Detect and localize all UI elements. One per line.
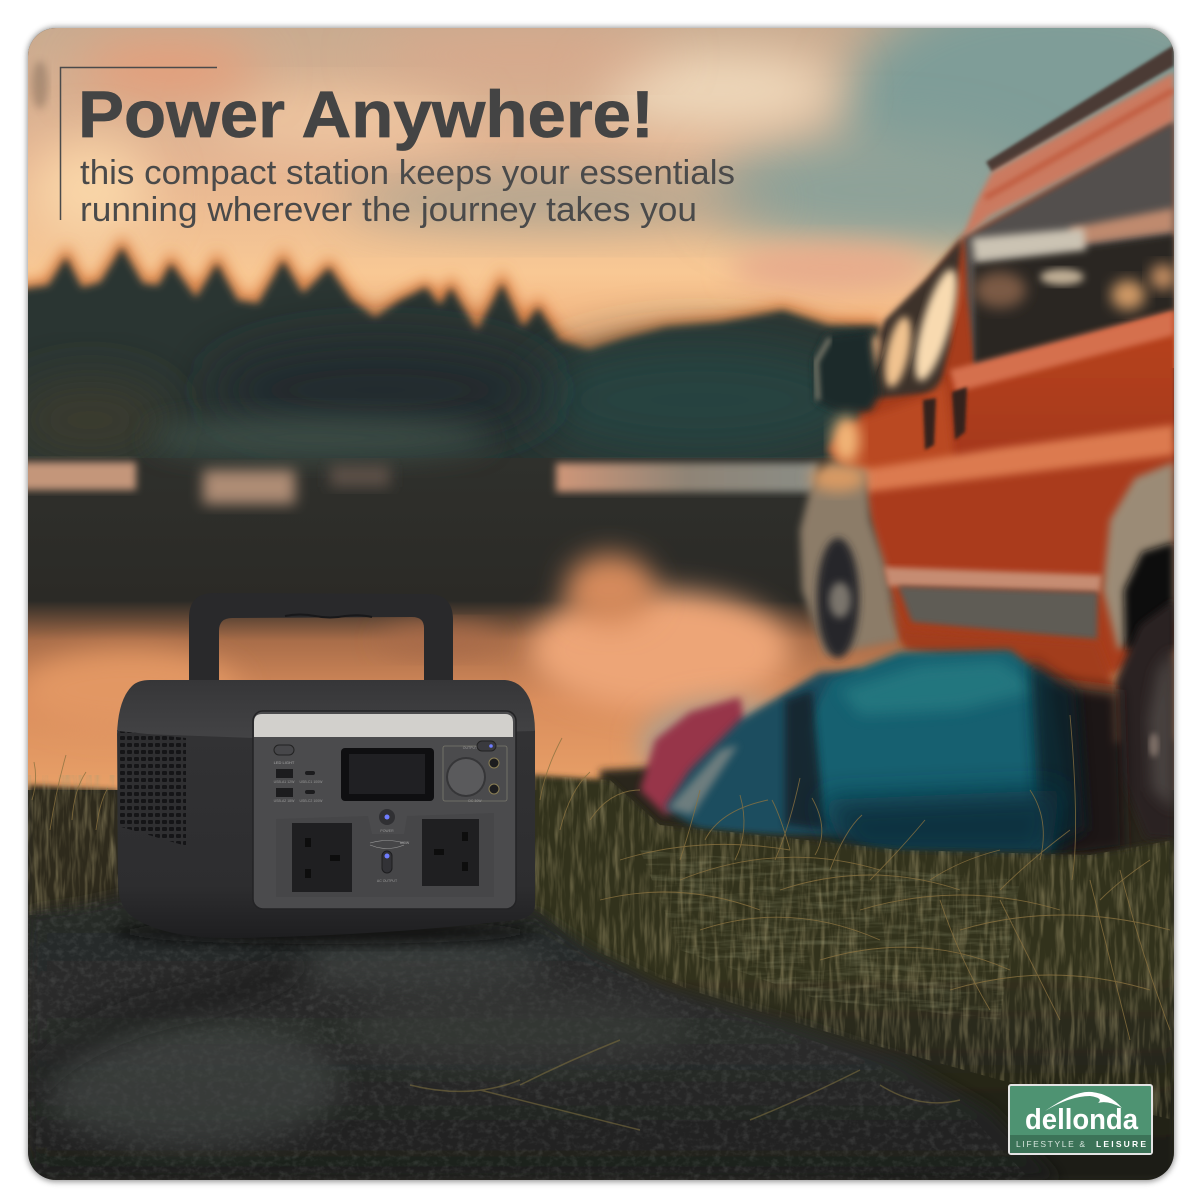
- front bumper and wheel arch: [800, 465, 900, 655]
- dellonda logo: LIFESTYLE &: [1016, 1139, 1085, 1149]
- dellonda logo: dellonda: [1025, 1104, 1139, 1136]
- USB ports: USB-A2 18W: [274, 799, 295, 803]
- car front windows: [866, 237, 964, 402]
- power button: [379, 809, 395, 833]
- fender: [828, 380, 955, 478]
- forest shading: [10, 340, 870, 460]
- station lid: [117, 680, 535, 738]
- side sill: [884, 567, 1102, 592]
- dellonda logo: [1009, 1085, 1152, 1154]
- lake highlights: [20, 462, 820, 790]
- subheading: [80, 154, 735, 229]
- rear wheel arch: [1103, 462, 1174, 650]
- rear wheel: [1110, 602, 1174, 790]
- USB ports: USB-C1 100W: [300, 780, 323, 784]
- ground behind bags: [594, 739, 1174, 794]
- DC output group: OUTPUT: [463, 746, 478, 750]
- AC output switch: 600W: [400, 841, 410, 845]
- USB ports: [274, 769, 323, 803]
- grass on shore: [28, 775, 1174, 1180]
- heading: Power Anywhere!: [78, 77, 654, 151]
- DC output group: [443, 741, 507, 803]
- dark under car: [1040, 680, 1125, 860]
- USB ports: USB-C2 100W: [300, 799, 323, 803]
- red bag: [640, 697, 745, 815]
- teal bag left: [665, 670, 860, 835]
- distant treeline: [0, 247, 880, 470]
- front panel: [253, 711, 516, 909]
- lake: [28, 458, 1174, 790]
- AC output switch: AC OUTPUT: [377, 879, 398, 883]
- station lower body: [117, 730, 535, 938]
- front wheel: [817, 538, 859, 658]
- car body underlay: [858, 120, 1174, 680]
- door handles: [923, 387, 967, 450]
- right UK socket: [422, 819, 479, 886]
- USB ports: USB-A1 12W: [274, 780, 295, 784]
- socket tray: [276, 813, 494, 897]
- car roof rack: [986, 45, 1174, 172]
- power button: POWER: [380, 829, 394, 833]
- ground shadow under station: [113, 920, 537, 944]
- dellonda logo: LEISURE: [1096, 1139, 1146, 1149]
- lake bank: [150, 416, 490, 460]
- grass blades: [32, 715, 1170, 1040]
- upper car door: [1040, 311, 1174, 430]
- subheading: this compact station keeps your essentials: [80, 154, 735, 192]
- lower car door: [874, 440, 1174, 562]
- subheading: running wherever the journey takes you: [80, 191, 697, 229]
- mirror: [814, 330, 880, 412]
- title frame line: [60, 68, 217, 220]
- DC output group: DC 30W: [468, 799, 482, 803]
- teal bag main: [806, 650, 1068, 850]
- car roof: [962, 72, 1174, 240]
- rock crack: [28, 960, 300, 1090]
- rock highlights: [305, 944, 538, 992]
- left UK socket: [292, 823, 352, 892]
- carry handle: [189, 593, 453, 682]
- rock: [20, 895, 1060, 1190]
- window reflection: [972, 208, 1176, 366]
- light bar: [254, 714, 513, 737]
- product: portable power station: [117, 593, 535, 938]
- LED light button: [274, 745, 295, 765]
- AC output switch: [370, 840, 410, 883]
- car: [800, 45, 1176, 840]
- handle grip: [285, 614, 372, 618]
- LCD display: [341, 748, 434, 801]
- LED light button: LED LIGHT: [274, 760, 295, 765]
- car rear window: [964, 122, 1174, 366]
- sky: [28, 0, 1200, 368]
- side vent: [118, 731, 186, 846]
- logo wave: [1045, 1092, 1122, 1111]
- camping bags: [640, 650, 1125, 860]
